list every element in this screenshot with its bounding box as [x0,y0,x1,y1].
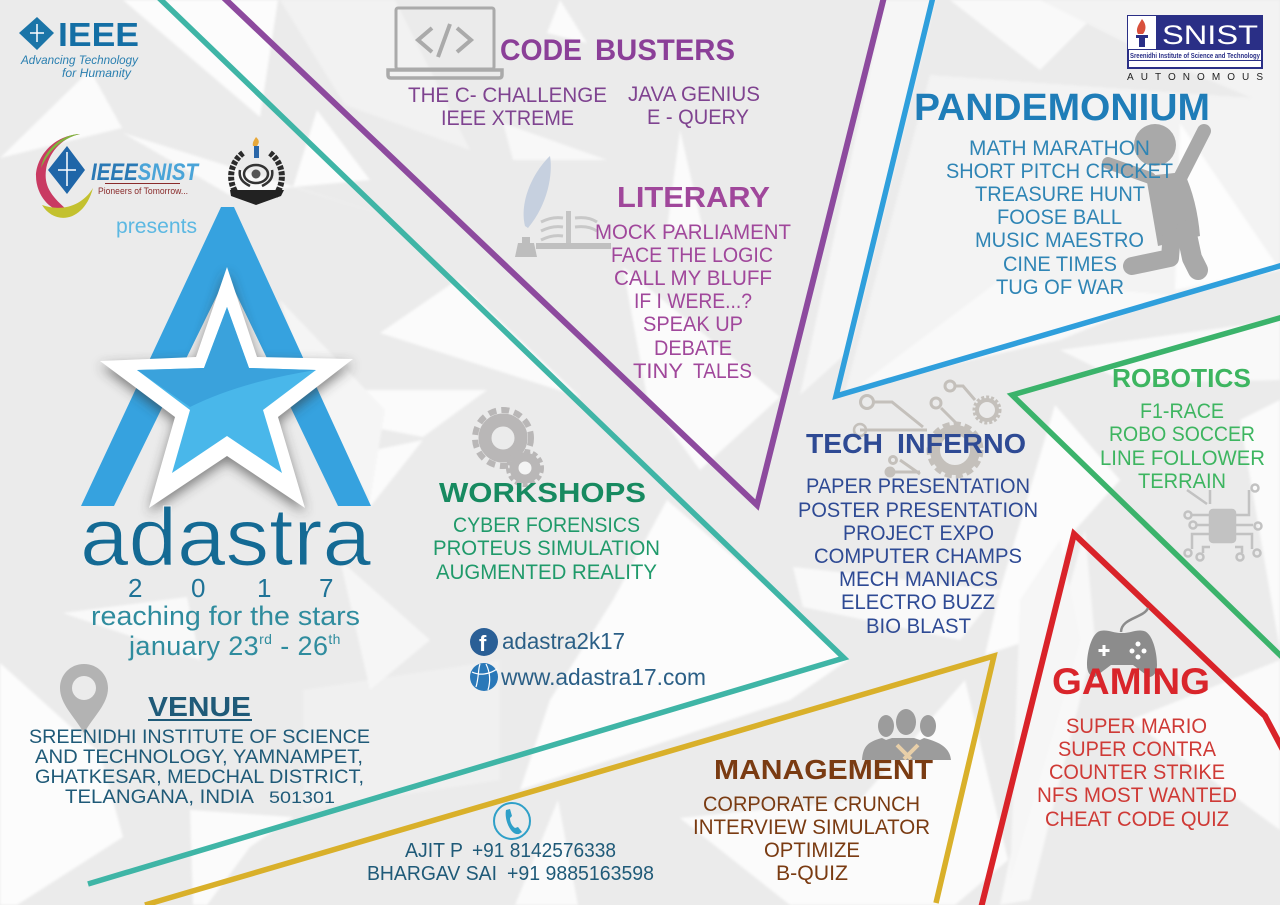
line: green frame [1012,317,1280,658]
panel: pandemonium: FOOSE BALL [997,206,1122,229]
panel: pandemonium: TUG OF WAR [996,276,1124,299]
icon: jumping figure [1108,124,1204,270]
text: year: 2 [128,573,142,603]
icon: circuit gears [854,381,1000,476]
panel: literary: TALES [693,360,752,383]
text: venue address: AND TECHNOLOGY, YAMNAMPET, [35,747,363,768]
panel: literary: FACE THE LOGIC [611,244,773,267]
panel: management: OPTIMIZE [764,839,860,862]
logo: IEEE [19,16,139,80]
logo: SNIST: SNIST [1162,20,1258,50]
panel: pandemonium: MUSIC MAESTRO [975,229,1144,252]
panel: literary: IF I WERE...? [634,290,752,313]
panel: code busters: E - QUERY [647,106,749,129]
logo: SNIST [1127,15,1263,83]
text: year: 7 [319,573,333,603]
panel: management: B-QUIZ [776,862,848,885]
logo: IEEE SNIST: IEEESNIST [91,159,200,186]
logo: IEEE SNIST: Pioneers of Tomorrow... [98,186,188,197]
panel: robotics: ROBO SOCCER [1109,423,1255,446]
panel: tech inferno: POSTER PRESENTATION [798,499,1038,522]
panel: tech inferno: ELECTRO BUZZ [841,591,995,614]
panel: code busters: CODE [500,34,582,67]
text: presents: presents [116,215,197,238]
panel: workshops [433,477,660,584]
panel: robotics: F1-RACE [1140,400,1224,423]
social: website: www.adastra17.com [500,664,706,690]
text: contacts: BHARGAV SAI [367,863,497,885]
social: facebook: f [479,631,487,656]
panel: robotics: ROBOTICS [1112,363,1251,393]
panel: gaming: CHEAT CODE QUIZ [1045,808,1229,831]
panel: robotics [1100,363,1265,493]
text: contacts [367,840,654,885]
panel: workshops: CYBER FORENSICS [453,514,640,537]
panel: management: INTERVIEW SIMULATOR [693,816,930,839]
social: facebook: adastra2k17 [502,628,625,654]
text: dates: - 26 [272,631,328,661]
line: blue frame [836,0,1280,396]
text: contacts: AJIT P [405,840,463,862]
panel: pandemonium [914,87,1210,299]
logo: SNIST: AUTONOMOUS [1127,72,1263,83]
logo: IEEE: for Humanity [62,66,132,80]
panel: robotics: LINE FOLLOWER [1100,447,1265,470]
icon: game controller [1087,608,1157,677]
line: teal frame [88,0,844,884]
panel: pandemonium: MATH MARATHON [969,137,1150,160]
panel: code busters: BUSTERS [595,34,735,67]
panel: gaming: GAMING [1052,661,1210,702]
panel: code busters: THE C- CHALLENGE [408,84,607,107]
panel: pandemonium: CINE TIMES [1003,253,1117,276]
panel: code busters: JAVA GENIUS [628,83,760,106]
heading: venue: VENUE [148,691,251,722]
panel: tech inferno: BIO BLAST [866,615,971,638]
logo: club emblem [230,137,284,205]
panel: tech inferno: COMPUTER CHAMPS [814,545,1022,568]
panel: tech inferno: TECH [806,428,883,459]
line: red frame [981,534,1280,905]
icon: management team [862,709,951,760]
text: year: 0 [191,573,205,603]
panel: tech inferno: PROJECT EXPO [843,522,994,545]
icon: laptop code [388,8,502,78]
text: venue address: 501301 [269,788,335,807]
line: yellow frame [145,656,994,905]
panel: gaming: NFS MOST WANTED [1037,784,1237,807]
logo: IEEE: Advancing Technology [20,53,139,67]
icon: gears [475,410,542,485]
icon: location pin [60,664,108,733]
panel: tech inferno [798,428,1038,638]
panel: workshops: AUGMENTED REALITY [436,561,657,584]
panel: code busters [408,34,760,130]
text: tagline: reaching for the stars [91,601,360,631]
panel: workshops: PROTEUS SIMULATION [433,537,660,560]
panel: literary: DEBATE [654,337,732,360]
text: dates: january 23 [129,631,259,661]
panel: pandemonium: PANDEMONIUM [914,87,1210,129]
panel: literary: SPEAK UP [643,313,743,336]
text: dates: th [328,631,341,647]
text: venue address: SREENIDHI INSTITUTE OF SCIENCE [29,727,370,748]
text: venue address: GHATKESAR, MEDCHAL DISTRICT, [35,767,364,788]
panel: management: MANAGEMENT [714,754,933,785]
text: year: 1 [257,573,271,603]
panel: code busters: IEEE XTREME [441,107,574,130]
icon: phone [494,803,530,839]
panel: gaming [1037,661,1237,831]
panel: literary: CALL MY BLUFF [614,267,772,290]
panel: robotics: TERRAIN [1138,470,1226,493]
panel: literary: MOCK PARLIAMENT [595,221,791,244]
logo: adastra star [81,207,371,513]
panel: tech inferno: INFERNO [897,428,1026,459]
text: contacts: +91 9885163598 [507,863,654,885]
panel: tech inferno: MECH MANIACS [839,568,998,591]
panel: management [693,754,933,885]
text: contacts: +91 8142576338 [472,840,616,862]
panel: gaming: SUPER CONTRA [1058,738,1216,761]
logo: IEEE: IEEE [58,16,139,53]
text: venue address [29,727,370,808]
panel: literary: LITERARY [617,182,770,214]
panel: pandemonium: SHORT PITCH CRICKET [946,160,1173,183]
panel: pandemonium: TREASURE HUNT [975,183,1145,206]
panel: literary [595,182,791,383]
panel: gaming: COUNTER STRIKE [1049,761,1225,784]
text: dates: rd [259,631,272,647]
panel: gaming: SUPER MARIO [1066,715,1207,738]
panel: workshops: WORKSHOPS [439,477,646,508]
text: venue address: TELANGANA, INDIA [65,787,254,808]
icon: circuit chip [1184,484,1262,560]
panel: tech inferno: PAPER PRESENTATION [806,475,1030,498]
icon: book and quill [515,156,611,257]
line: purple frame [223,0,884,505]
panel: management: CORPORATE CRUNCH [703,793,920,816]
title: adastra: adastra [80,492,371,583]
panel: literary: TINY [633,360,683,383]
logo: IEEE SNIST [36,134,200,218]
